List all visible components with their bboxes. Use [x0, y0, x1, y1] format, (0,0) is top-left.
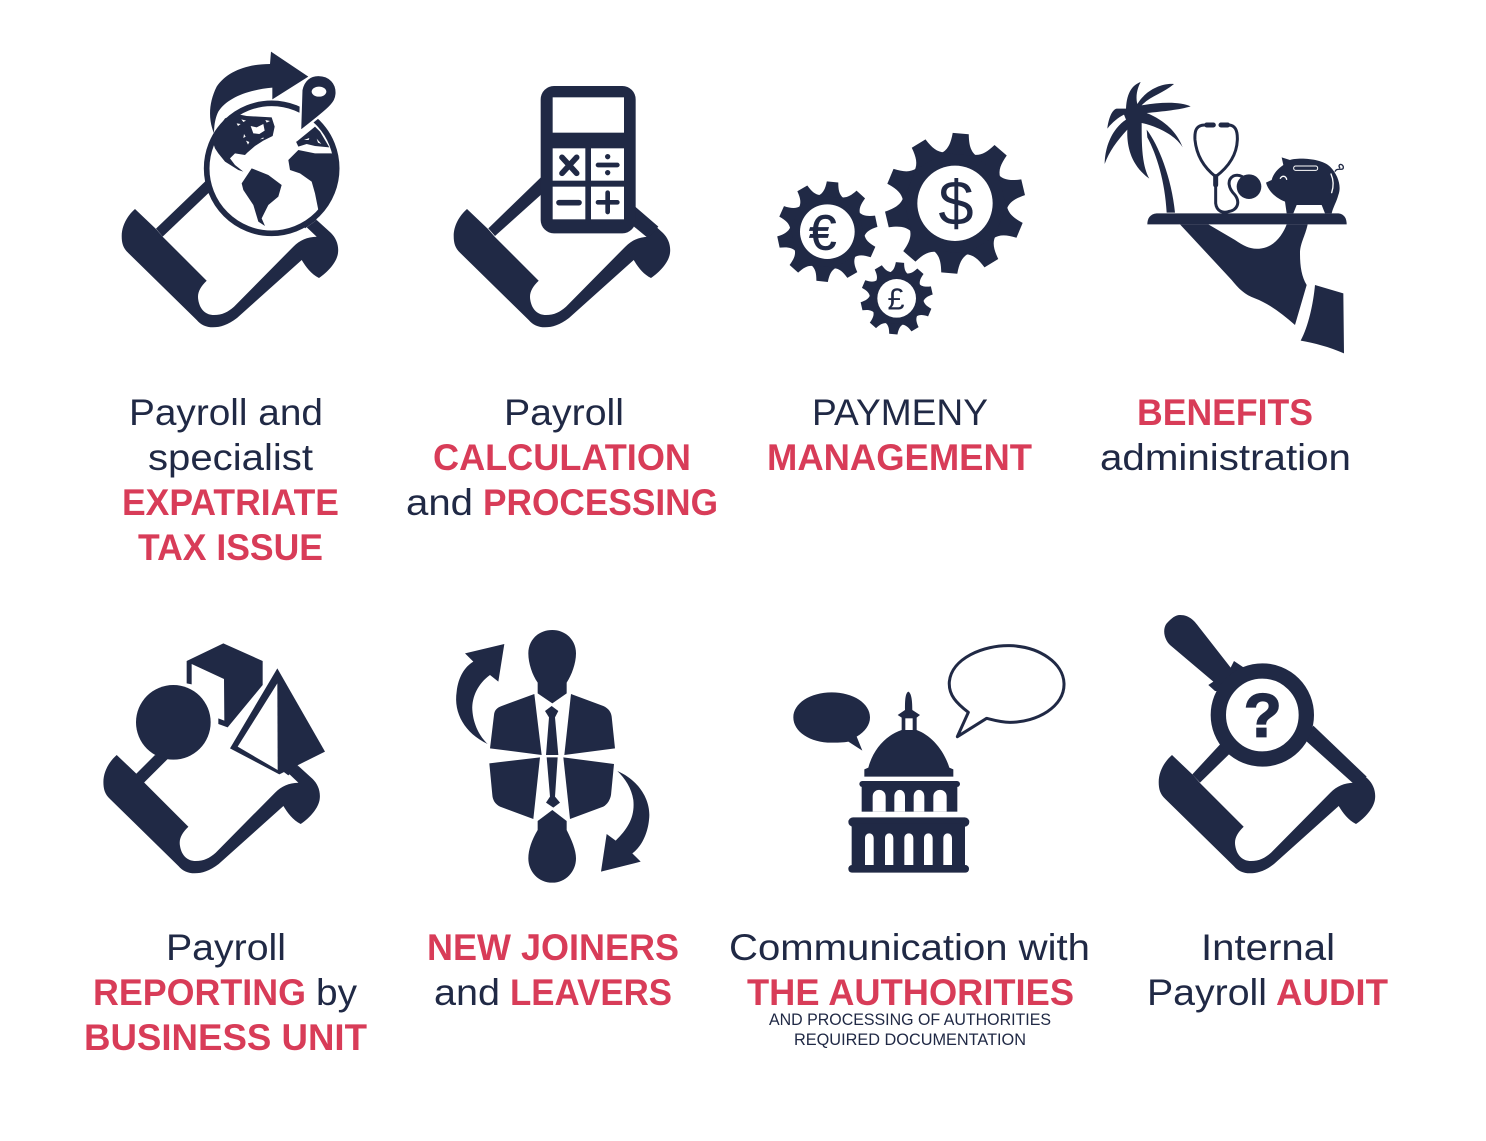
icon: scroll with magnifying glass and question mark: ?	[1244, 682, 1282, 751]
panel: reporting by business unit	[84, 643, 367, 1058]
label: expatriate tax issue	[122, 392, 339, 568]
panel: calculation and processing	[406, 86, 718, 523]
label: reporting by business unit: REPORTING	[93, 972, 306, 1013]
speech bubble: filled	[793, 692, 870, 751]
piggy bank	[1266, 157, 1343, 213]
label: calculation and processing: PROCESSING	[483, 482, 718, 523]
label: expatriate tax issue: TAX ISSUE	[138, 527, 323, 568]
panel: payment management	[767, 128, 1032, 478]
label: internal payroll audit: Payroll	[1147, 972, 1267, 1013]
label: calculation and processing	[406, 392, 718, 523]
tray	[1147, 213, 1347, 224]
hand	[1180, 224, 1308, 325]
label: expatriate tax issue: EXPATRIATE	[122, 482, 339, 523]
label: payment management: MANAGEMENT	[767, 437, 1032, 478]
speech bubble: outline	[949, 646, 1064, 737]
label: reporting by business unit: by	[316, 972, 358, 1013]
gear: pound: £	[887, 282, 905, 316]
label: communication with the authorities	[729, 927, 1090, 1049]
label: new joiners and leavers: and	[434, 972, 500, 1013]
label: benefits administration: administration	[1100, 437, 1351, 478]
gear: dollar	[878, 128, 1032, 279]
colonnade: lower	[848, 817, 969, 873]
label: expatriate tax issue: Payroll and	[129, 392, 323, 433]
label: calculation and processing: and	[406, 482, 473, 523]
stethoscope	[1195, 125, 1261, 212]
label: reporting by business unit: BUSINESS UNIT	[84, 1017, 367, 1058]
label: new joiners and leavers: LEAVERS	[510, 972, 672, 1013]
label: internal payroll audit	[1147, 927, 1388, 1013]
colonnade: upper	[859, 781, 960, 812]
gear: pound	[856, 259, 937, 338]
label: reporting by business unit: Payroll	[166, 927, 286, 968]
label: new joiners and leavers	[427, 927, 679, 1013]
panel: internal audit	[1147, 615, 1388, 1013]
icon: hand holding tray with palm, stethoscope and piggy bank	[1105, 82, 1347, 353]
cuff	[1301, 285, 1344, 353]
panel: communication with the authorities	[729, 646, 1090, 1049]
label: expatriate tax issue: specialist	[148, 437, 314, 478]
panel: benefits administration	[1100, 82, 1351, 478]
label: new joiners and leavers: NEW JOINERS	[427, 927, 679, 968]
label: payment management: PAYMENY	[812, 392, 988, 433]
icon: scroll with calculator	[454, 86, 670, 327]
gear: euro	[771, 177, 884, 287]
label: communication with the authorities: THE AUTHORITIES	[747, 972, 1074, 1013]
icon: capitol building with speech bubbles	[793, 646, 1064, 873]
label: communication with the authorities: AND PROCESSING OF AUTHORITIES	[769, 1010, 1051, 1029]
gear: dollar: $	[938, 169, 974, 239]
icon: scroll with magnifying glass and question mark	[1159, 615, 1375, 873]
label: payment management	[767, 392, 1032, 478]
label: calculation and processing: CALCULATION	[433, 437, 691, 478]
dome	[864, 692, 953, 777]
label: communication with the authorities: REQUIRED DOCUMENTATION	[794, 1030, 1026, 1049]
label: internal payroll audit: AUDIT	[1276, 972, 1388, 1013]
gear: euro: €	[809, 205, 836, 260]
icon: currency gears	[771, 128, 1032, 338]
icon: mirrored businessmen with arrows	[456, 630, 649, 883]
label: reporting by business unit	[84, 927, 367, 1058]
label: benefits administration: BENEFITS	[1137, 392, 1313, 433]
label: benefits administration	[1100, 392, 1351, 478]
panel: expatriate tax	[122, 52, 339, 568]
label: internal payroll audit: Internal	[1201, 927, 1335, 968]
icon: scroll with globe, arrow and map pin	[122, 52, 338, 327]
label: calculation and processing: Payroll	[504, 392, 624, 433]
icon: scroll with circle, cube and pyramid	[103, 643, 325, 873]
label: communication with the authorities: Communication with	[729, 927, 1090, 968]
panel: new joiners and leavers	[427, 630, 679, 1013]
palm tree	[1105, 82, 1191, 213]
